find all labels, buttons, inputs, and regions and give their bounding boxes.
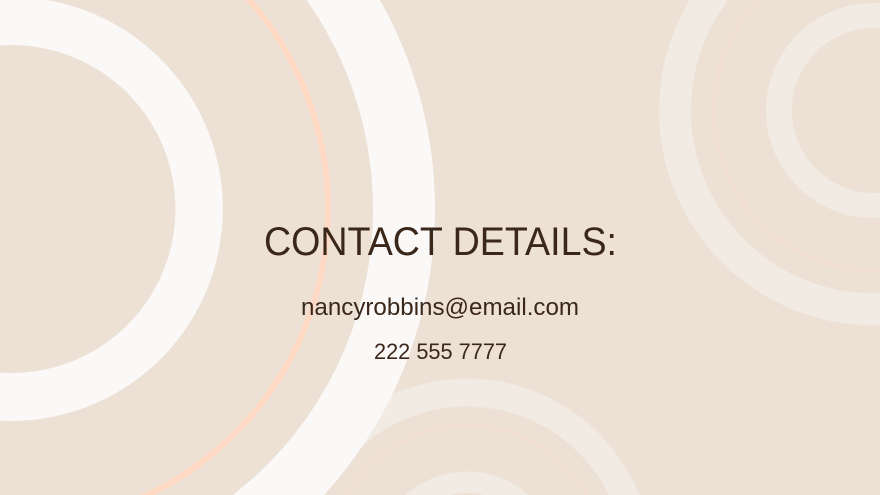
contact text block xyxy=(264,220,617,364)
title: CONTACT DETAILS: xyxy=(264,220,617,264)
concentric rings: left xyxy=(0,0,435,495)
concentric rings: bottom centre xyxy=(294,379,640,495)
concentric rings: top right xyxy=(659,0,880,325)
phone number: 222 555 7777 xyxy=(374,339,507,364)
email address: nancyrobbins@email.com xyxy=(301,294,579,321)
